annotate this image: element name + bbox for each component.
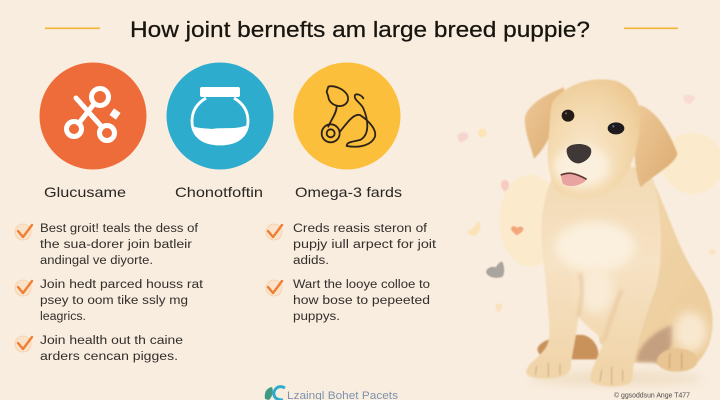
paw right [590,361,633,387]
bullet 2: psey to oom tike ssly mg [40,295,188,307]
muzzle [553,147,610,187]
bullet 5: puppys. [293,311,340,323]
label: Glucusame: Glucusame [44,184,126,200]
shadow [530,371,703,386]
icon: orange joint circle [40,62,146,170]
bullet 5 [266,279,430,323]
left ear [525,87,564,159]
bullet 5: how bose to pepeeted [293,295,430,307]
bullet 2 [15,279,204,323]
title: How joint bernefts am large breed puppie? [130,17,590,42]
belly shadow [637,325,673,363]
credit: © ggsoddsun Ange T477 [614,391,690,399]
eye right [608,122,624,134]
bullet 3: Join health out th caine [40,335,183,347]
decorative hearts [457,95,716,313]
right ear [635,105,677,187]
label: Omega-3 fards: Omega-3 fards [295,184,402,200]
dog body group [525,79,713,387]
paw left [526,360,571,379]
mouth [561,173,587,186]
bullet 1: the sua-dorer join batleir [40,239,192,251]
footer logo [265,387,399,400]
foreleg shading [578,273,622,341]
far hind foot [537,335,598,359]
chest and forelegs [526,162,661,386]
bullet 4: adids. [293,255,329,267]
bullet 4: Creds reasis steron of [293,223,428,235]
bullet 4 [266,223,437,267]
bullet 4: pupjy iull arpect for joit [293,239,437,251]
eye left [562,110,574,122]
haunch highlight [674,312,707,352]
title rule right [624,28,678,29]
hind paw [657,348,698,372]
bullet 2: leagrics. [40,311,86,323]
hind toes [669,353,682,369]
nose [567,144,591,163]
bullet 3 [15,335,183,363]
bullet 1: Best groit! teals the dess of [40,223,199,235]
title rule left [45,28,100,29]
bullet 1 [15,223,199,267]
icon: blue jar circle [166,62,274,170]
label: Chonotfoftin: Chonotfoftin [175,184,263,200]
bullet 3: arders cencan pigges. [40,351,178,363]
body back and haunch [580,170,713,371]
bullet 5: Wart the looye colloe to [293,279,430,291]
icon: yellow pet circle [294,62,400,170]
head [548,79,640,198]
puppy illustration with background decorations [457,79,720,399]
bullet 2: Join hedt parced houss rat [40,279,204,291]
grey heart [486,261,504,278]
decorative pale circles [499,133,720,267]
bullet 1: andingal ve diyorte. [40,255,153,267]
chest highlight [555,222,635,272]
